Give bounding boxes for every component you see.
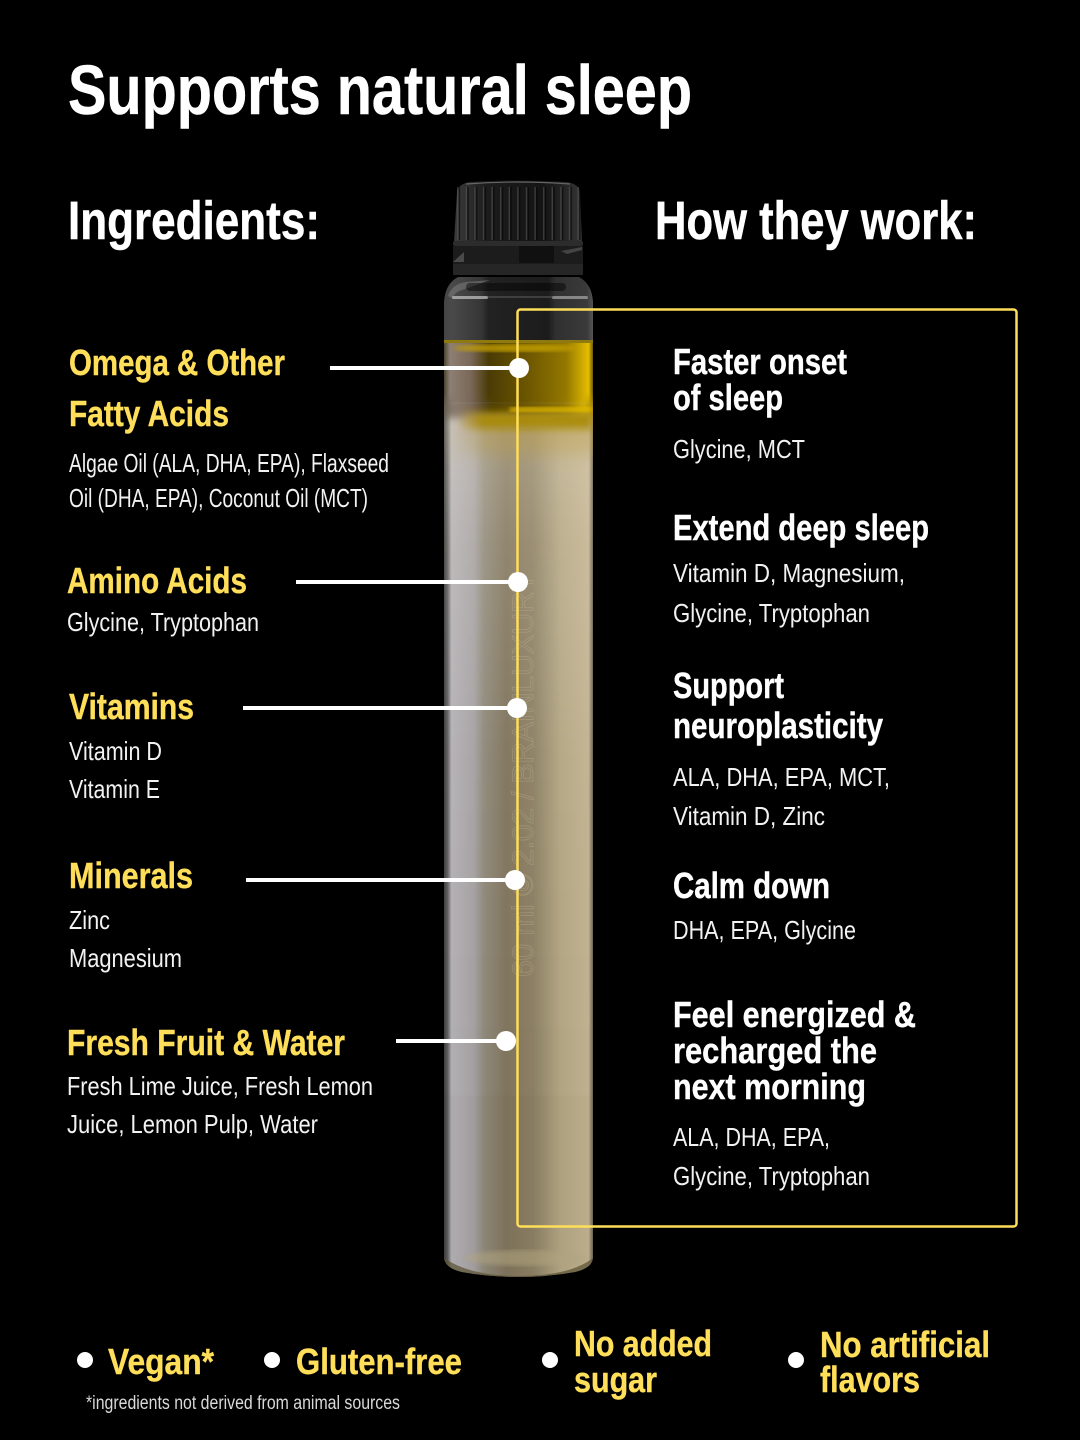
ingredient: fresh fruit and water: Juice, Lemon Pulp, Water [67,1109,318,1139]
yellow outlined panel [518,310,1016,1226]
heading: how they work: How they work: [655,191,977,251]
benefit: feel energized: next morning [673,1066,866,1107]
ingredient: fresh fruit and water [67,1022,373,1139]
badge: gluten-free: Gluten-free [296,1341,462,1382]
ingredient: amino acids: Amino Acids [67,560,247,601]
ingredient: fresh fruit and water: Fresh Fruit & Water [67,1022,345,1063]
benefit: feel energized: Glycine, Tryptophan [673,1161,870,1191]
benefit: extend deep sleep: Glycine, Tryptophan [673,598,870,628]
badge: vegan: Vegan* [108,1341,214,1382]
badge: no added sugar: No added [574,1323,712,1364]
ingredient: minerals: Magnesium [69,943,182,973]
badge: no added sugar: sugar [574,1359,657,1400]
badge: no artificial flavors: No artificial [820,1324,990,1365]
ingredient: minerals: Zinc [69,905,110,935]
benefit: support neuroplasticity: Vitamin D, Zinc [673,801,825,831]
benefit: calm down: DHA, EPA, Glycine [673,915,856,945]
benefit: support neuroplasticity: Support [673,665,784,706]
golden transition under oil [444,420,614,454]
benefit: faster onset of sleep: of sleep [673,377,783,418]
connector: fruit and water [396,1031,516,1051]
benefit: support neuroplasticity: neuroplasticity [673,705,883,746]
connector: vitamins [243,698,527,718]
benefit: extend deep sleep [673,507,929,628]
ingredient: fresh fruit and water: Fresh Lime Juice, Fresh Lemon [67,1071,373,1101]
badge: no artificial flavors [788,1324,990,1400]
benefit: feel energized: recharged the [673,1030,877,1071]
liquid lighter upper tone [444,414,593,706]
title: Supports natural sleep [68,51,692,129]
badge: no artificial flavors: flavors [820,1359,920,1400]
benefit: calm down: Calm down [673,865,830,906]
ingredient: amino acids: Glycine, Tryptophan [67,607,259,637]
benefit: faster onset of sleep: Glycine, MCT [673,434,805,464]
benefit: extend deep sleep: Extend deep sleep [673,507,929,548]
ingredient: vitamins [69,686,194,804]
ingredient: vitamins: Vitamins [69,686,194,727]
ingredient: minerals [69,855,193,973]
glass bottle upper section [444,277,593,342]
ingredient: vitamins: Vitamin D [69,736,162,766]
badge: no added sugar [542,1323,712,1400]
ingredient: minerals: Minerals [69,855,193,896]
benefit: feel energized: ALA, DHA, EPA, [673,1122,830,1152]
ingredient: vitamins: Vitamin E [69,774,160,804]
embossed bottle text: 60 ml © 2.02 / BRAINLUXURY [507,572,540,977]
heading: ingredients: Ingredients: [68,191,320,251]
ingredient: omega and other fatty acids: Oil (DHA, EPA), Coconut Oil (MCT) [69,483,368,513]
benefit: extend deep sleep: Vitamin D, Magnesium, [673,558,905,588]
bottle cap [453,180,583,275]
benefit: feel energized: Feel energized & [673,994,916,1035]
oil layer [440,340,597,429]
ingredient: omega and other fatty acids: Fatty Acids [69,393,229,434]
footnote: *ingredients not derived from animal sources [86,1393,400,1414]
connector: amino acids [296,572,528,592]
benefit: support neuroplasticity [673,665,890,831]
benefit: faster onset of sleep [673,341,847,464]
liquid base pool [466,1249,552,1267]
ingredient: omega and other fatty acids: Omega & Other [69,342,285,383]
ingredient: omega and other fatty acids [69,342,389,513]
benefit: calm down [673,865,856,945]
connector: minerals [246,870,525,890]
benefit: faster onset of sleep: Faster onset [673,341,847,382]
ingredient: omega and other fatty acids: Algae Oil (ALA, DHA, EPA), Flaxseed [69,448,389,478]
bottle illustration [444,180,593,1277]
benefit: support neuroplasticity: ALA, DHA, EPA, MCT, [673,762,890,792]
bottle liquid [444,340,593,1277]
benefit: feel energized [673,994,916,1191]
ingredient: amino acids [67,560,259,637]
connector: omega [330,358,529,378]
